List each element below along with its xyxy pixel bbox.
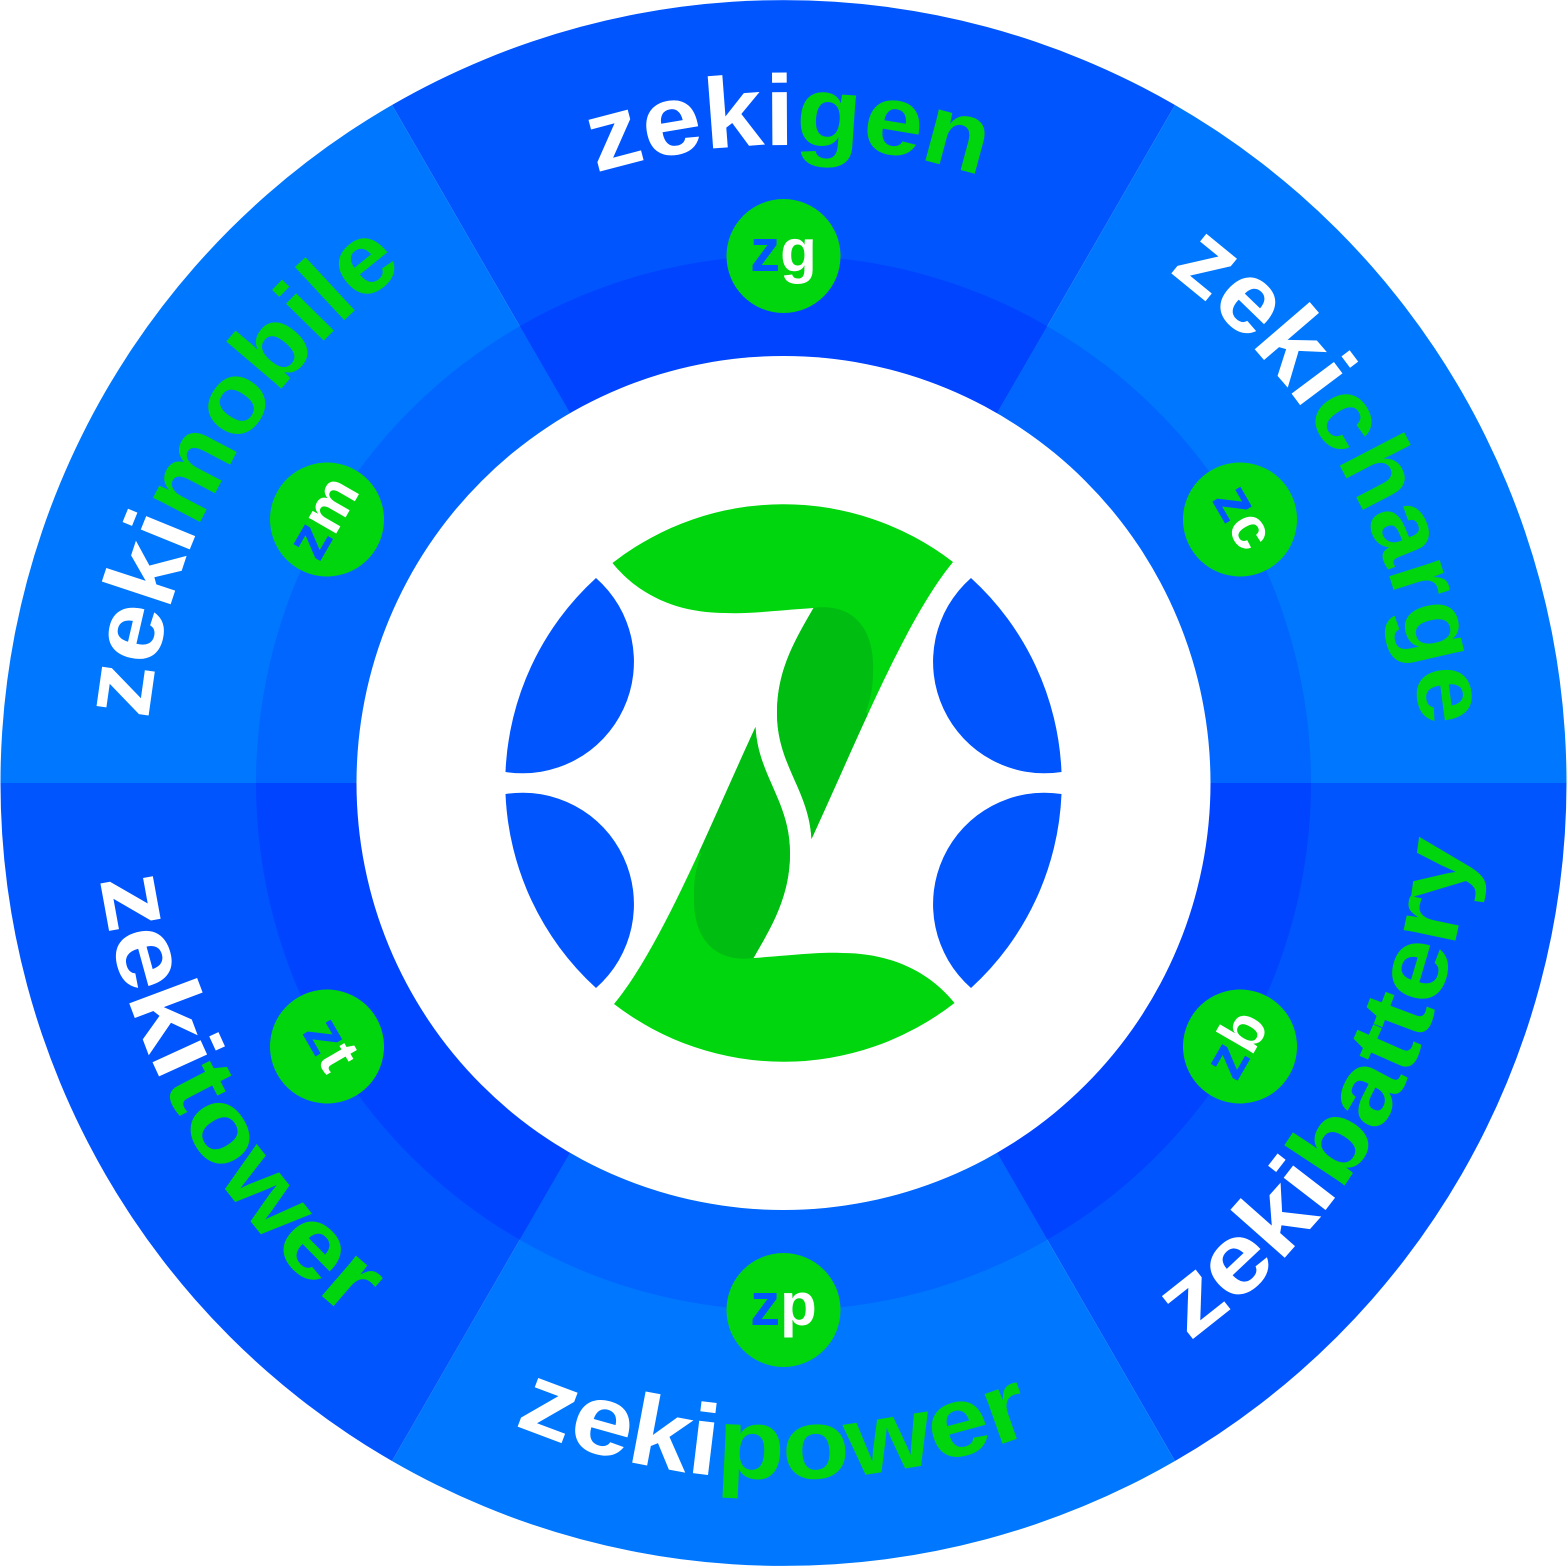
badge: zp (726, 1253, 840, 1367)
inner ring sectors (256, 256, 1311, 1310)
badge: zg: zg (750, 217, 817, 284)
badge: zp: zp (750, 1271, 817, 1338)
badge: zb (1162, 969, 1318, 1124)
badge: zm (249, 442, 405, 597)
badge: zt (249, 969, 405, 1124)
badge: zc (1162, 442, 1318, 597)
logo: lower green stroke (614, 706, 954, 1062)
label: zekitower: zekitower (100, 876, 383, 1306)
badge: zm: zm (272, 464, 372, 570)
label: zekicharge: zekicharge (1171, 234, 1472, 721)
logo: blue segments (506, 578, 1062, 988)
label: zekimobile: zekimobile (96, 238, 394, 716)
label: zekibattery: zekibattery (1162, 836, 1486, 1339)
label: zekigen: zekigen (588, 72, 985, 174)
badge: zb: zb (1190, 998, 1281, 1089)
badge: zt: zt (290, 1005, 373, 1082)
logo: upper green stroke (612, 504, 953, 860)
central logo (506, 504, 1062, 1062)
label: zekipower: zekipower (518, 1378, 1020, 1498)
badge: zc: zc (1200, 473, 1290, 561)
badge: zg (726, 199, 840, 313)
central white disc (356, 356, 1210, 1210)
